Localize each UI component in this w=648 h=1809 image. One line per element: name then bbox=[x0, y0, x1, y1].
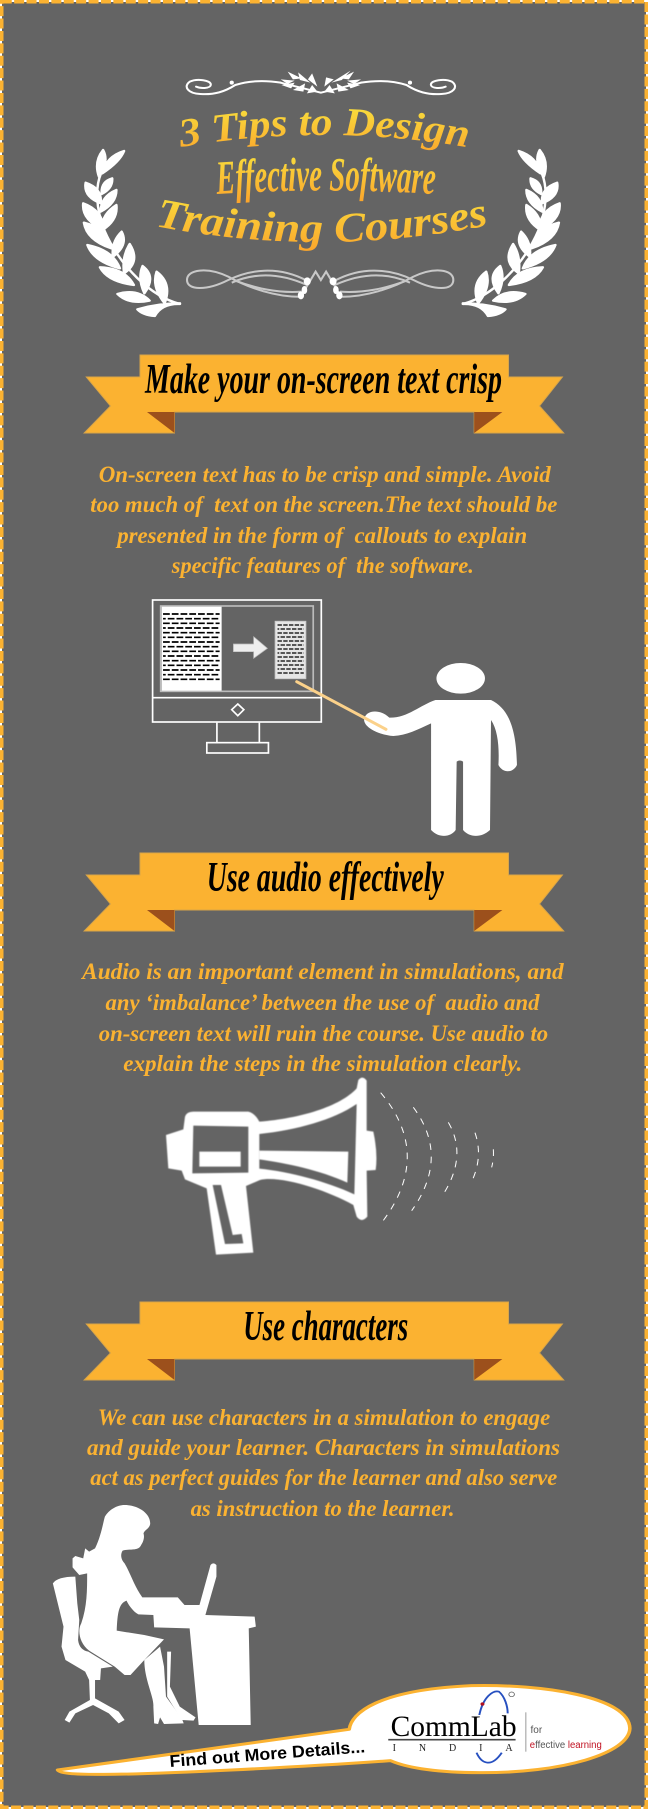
title: 3 Tips to Design: 3 Tips to Design bbox=[180, 109, 468, 150]
body text: specific features of the software. bbox=[171, 553, 474, 578]
logo: CommLab India bbox=[388, 1691, 602, 1763]
body text: and guide your learner. Characters in simulations bbox=[87, 1435, 560, 1460]
section 2: audio bbox=[80, 853, 564, 1255]
logo: CommLab India: for bbox=[530, 1725, 543, 1736]
callout text: Find out More Details... bbox=[169, 1737, 366, 1771]
title: Effective Software: Effective Software bbox=[216, 157, 436, 204]
body text: act as perfect guides for the learner and also serve bbox=[90, 1465, 557, 1490]
body text bbox=[90, 462, 557, 578]
logo: CommLab India: CommLab bbox=[391, 1710, 517, 1743]
ribbon heading: Make your on-screen text crisp bbox=[84, 355, 564, 433]
body text: any ‘imbalance’ between the use of audio and bbox=[106, 990, 540, 1015]
body text: on-screen text will ruin the course. Use audio to bbox=[99, 1021, 548, 1046]
section 3: characters bbox=[53, 1302, 630, 1774]
title: Training Courses: Training Courses bbox=[158, 200, 486, 251]
ribbon heading: Use characters bbox=[84, 1302, 564, 1380]
sound waves bbox=[381, 1093, 493, 1223]
body text: as instruction to the learner. bbox=[191, 1496, 455, 1521]
section 1: on-screen text bbox=[84, 355, 564, 836]
ribbon heading: Use characters: Use characters bbox=[243, 1304, 408, 1350]
body text bbox=[80, 959, 564, 1076]
callout: find out more details with logo bbox=[58, 1686, 630, 1774]
body text: too much of text on the screen.The text should be bbox=[90, 492, 557, 517]
body text: presented in the form of callouts to explain bbox=[115, 523, 527, 548]
icon: right laurel bbox=[463, 150, 560, 316]
chair bbox=[53, 1577, 125, 1723]
ribbon heading: Use audio effectively bbox=[84, 853, 564, 931]
body text bbox=[87, 1405, 560, 1521]
ribbon heading: Use audio effectively: Use audio effectively bbox=[207, 855, 444, 901]
ornament: bottom flourish bbox=[187, 270, 453, 299]
icon: left laurel bbox=[83, 150, 180, 316]
woman and desk bbox=[73, 1505, 256, 1725]
header: ornaments and title bbox=[82, 70, 561, 318]
body text: Audio is an important element in simulations, and bbox=[80, 959, 564, 984]
body text: explain the steps in the simulation clearly. bbox=[123, 1051, 522, 1076]
icon: computer monitor bbox=[153, 600, 321, 753]
logo: CommLab India: effective learning bbox=[530, 1740, 602, 1751]
pointer stick bbox=[297, 682, 386, 729]
body text: We can use characters in a simulation to engage bbox=[98, 1405, 550, 1430]
icon: megaphone bbox=[166, 1078, 493, 1255]
legs bbox=[144, 1647, 184, 1724]
icon: woman at desk with laptop bbox=[53, 1505, 256, 1725]
body text: On-screen text has to be crisp and simple. Avoid bbox=[99, 462, 551, 487]
ornament: top flourish bbox=[187, 71, 455, 94]
logo: CommLab India: INDIA bbox=[393, 1743, 513, 1754]
icon: presenter figure bbox=[297, 663, 517, 836]
